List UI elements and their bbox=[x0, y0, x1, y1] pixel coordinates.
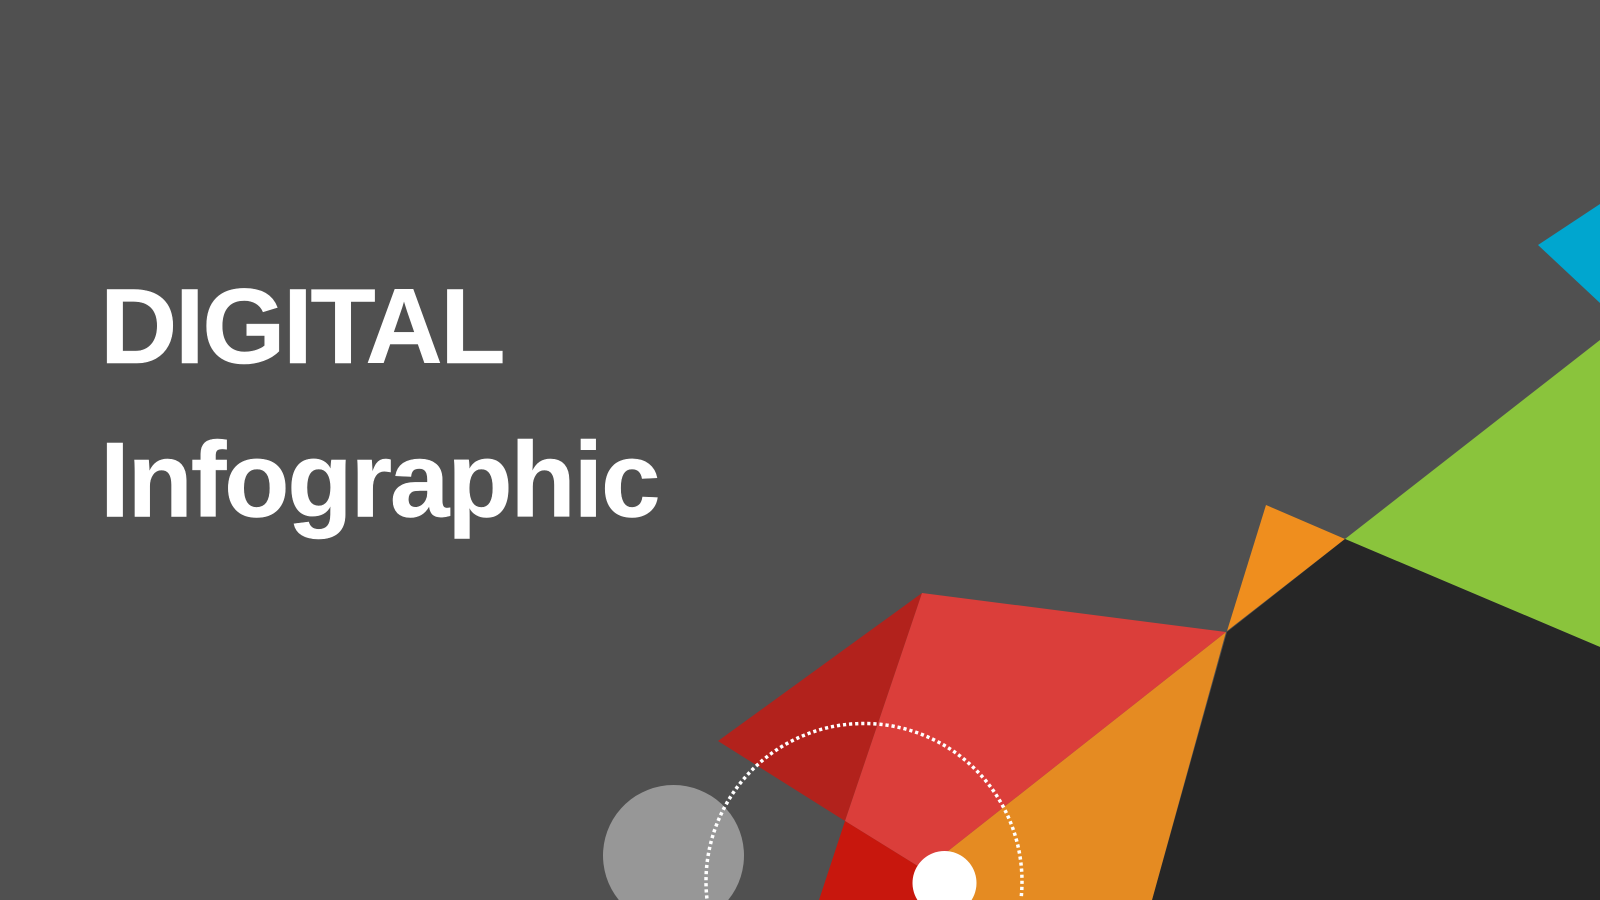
triangle: small orange bbox=[1227, 505, 1345, 631]
triangle: dark red bbox=[718, 593, 922, 821]
circle: dotted ring bbox=[706, 723, 1022, 898]
triangle: green bbox=[1345, 340, 1600, 647]
circle: white dot bbox=[912, 851, 976, 900]
polygon: orange bbox=[900, 632, 1226, 900]
geometric shapes cluster bbox=[603, 204, 1600, 900]
polygon: bright red bbox=[819, 821, 945, 900]
polygon: light red bbox=[845, 593, 1226, 883]
title line: DIGITAL: DIGITAL bbox=[100, 266, 503, 386]
triangle: blue bbox=[1538, 204, 1600, 303]
title line: Infographic: Infographic bbox=[100, 420, 658, 540]
title bbox=[100, 266, 658, 540]
polygon: dark charcoal bbox=[1152, 539, 1600, 900]
circle: grey bbox=[603, 785, 744, 900]
